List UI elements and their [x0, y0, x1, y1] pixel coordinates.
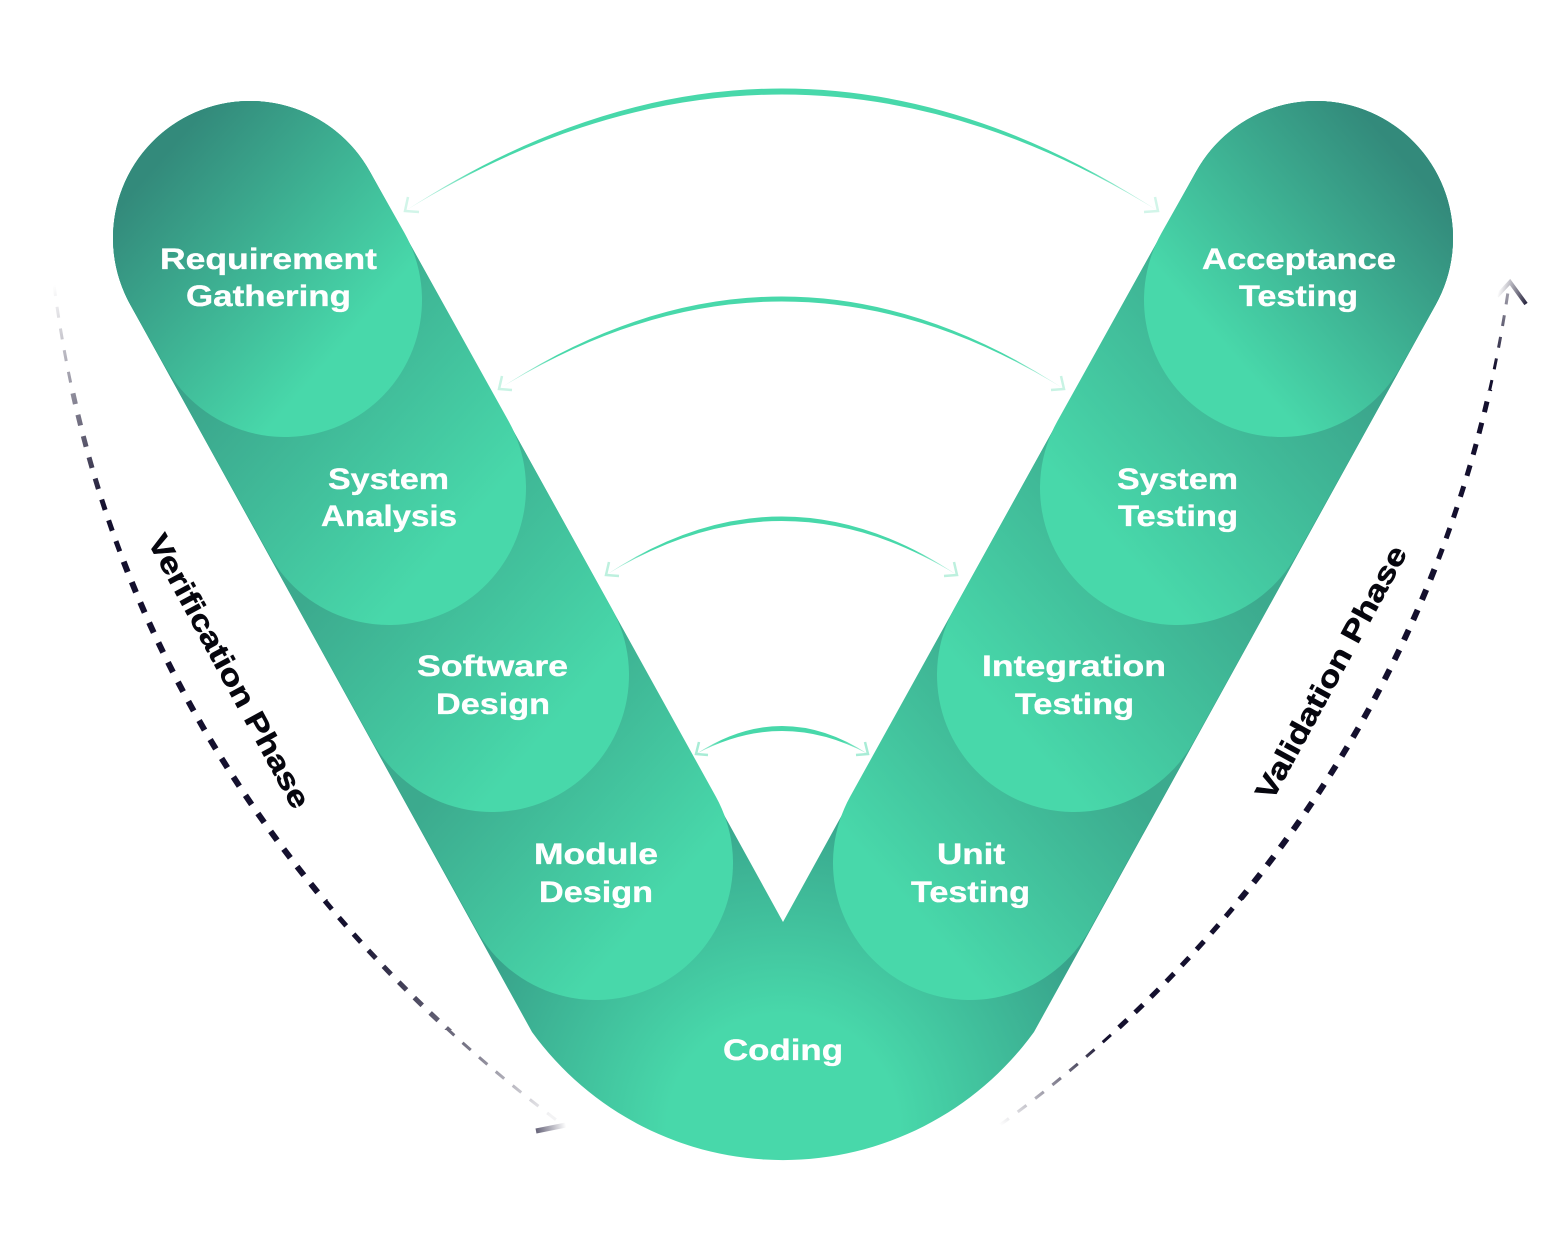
arrow: module design to unit testing [696, 726, 868, 755]
heading: Verification Phase: Verification Phase [141, 529, 316, 814]
label: Requirement Gathering [160, 243, 377, 313]
label: Software Design: Software [417, 650, 568, 683]
arrow: verification phase dashed [54, 285, 566, 1131]
band: system testing [1177, 238, 1316, 488]
label: System Testing: System [1117, 463, 1238, 496]
label: Unit Testing [911, 838, 1030, 909]
arrow: software design to integration testing [606, 516, 957, 576]
V diagram [130, 172, 1436, 1160]
label: Module Design: Module [534, 838, 658, 871]
arrow: system analysis to system testing [499, 296, 1064, 390]
label: System Analysis [321, 463, 457, 533]
heading: Validation Phase: Validation Phase [1249, 540, 1414, 805]
band: requirement gathering [250, 238, 285, 300]
label: Acceptance Testing: Testing [1239, 280, 1358, 313]
label: Integration Testing: Integration [982, 650, 1166, 683]
label: Integration Testing: Testing [1015, 688, 1134, 721]
band: system analysis [250, 238, 389, 488]
label: Unit Testing: Testing [911, 876, 1030, 909]
label: Acceptance Testing: Acceptance [1202, 243, 1396, 276]
arrow: requirement to acceptance [405, 88, 1158, 212]
label: Software Design: Design [436, 688, 550, 721]
band: acceptance testing [1281, 238, 1316, 300]
band: unit testing [970, 238, 1316, 863]
band: module design [250, 238, 596, 863]
arrow: validation phase dashed [1000, 282, 1526, 1125]
label: System Analysis: Analysis [321, 500, 457, 533]
label: System Testing [1117, 463, 1238, 533]
label: Acceptance Testing [1202, 243, 1396, 313]
band: coding base [130, 172, 1436, 1160]
label: System Analysis: System [328, 463, 449, 496]
label: Software Design [417, 650, 568, 721]
label: Module Design [534, 838, 658, 909]
label: System Testing: Testing [1118, 500, 1238, 533]
label: Requirement Gathering: Gathering [186, 280, 351, 313]
label: Requirement Gathering: Requirement [160, 243, 377, 276]
band: software design [250, 238, 492, 675]
label: Module Design: Design [539, 876, 653, 909]
label: Unit Testing: Unit [937, 838, 1005, 871]
label: Coding: Coding [723, 1034, 843, 1067]
band: integration testing [1074, 238, 1316, 675]
label: Integration Testing [982, 650, 1166, 721]
